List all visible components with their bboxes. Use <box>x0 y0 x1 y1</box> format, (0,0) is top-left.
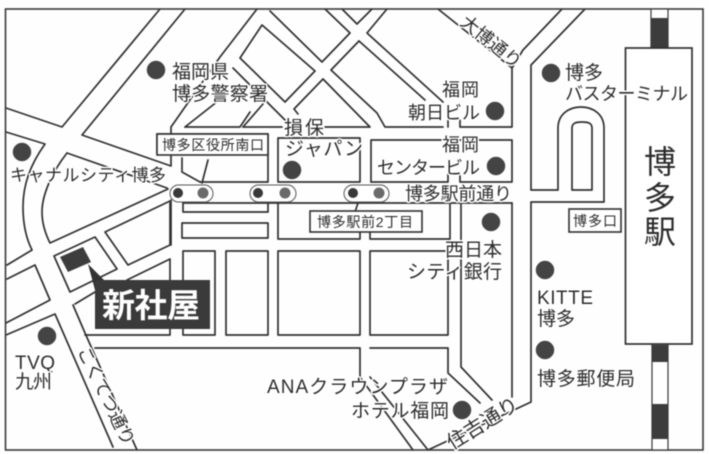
landmark: Fukuoka Center Building: 福岡 <box>442 135 479 155</box>
bus stop: Hakata station front 2-chome <box>310 211 422 232</box>
landmark: Hakata Bus Terminal <box>542 62 688 104</box>
bus stop: Hakata ward office south: 博多区役所南口 <box>162 137 264 153</box>
landmark: TVQ Kyushu: TVQ <box>15 353 55 374</box>
landmark: TVQ Kyushu: 九州 <box>15 371 52 393</box>
landmark: Fukuoka Asahi Building <box>408 80 504 123</box>
station name: 駅 <box>644 214 676 250</box>
landmark: Sompo Japan: ジャパン <box>285 139 363 160</box>
landmark: Fukuoka Prefectural Hakata Police Station: 博多警察署 <box>172 83 268 105</box>
stop 3 <box>344 185 389 202</box>
landmark: Fukuoka Center Building: センタービル <box>377 158 480 178</box>
landmark: Hakata Post Office: 博多郵便局 <box>537 368 635 390</box>
landmark: Hakata Post Office <box>536 341 635 390</box>
Hakata exit label: 博多口 <box>573 213 617 229</box>
landmark: Canal City Hakata <box>10 143 166 185</box>
railway track top <box>651 9 668 48</box>
landmark: KITTE Hakata: KITTE <box>537 288 593 309</box>
landmark: Hakata Bus Terminal: 博多 <box>565 62 603 84</box>
bus stop: Hakata station front 2-chome: 博多駅前2丁目 <box>317 214 413 230</box>
callout: new office <box>95 280 210 329</box>
landmark: Fukuoka Asahi Building: 福岡 <box>442 80 479 100</box>
landmark: Sompo Japan: 損保 <box>284 117 324 139</box>
bus stop capsules on main street <box>170 185 389 202</box>
station name <box>644 144 676 250</box>
landmark: Fukuoka Prefectural Hakata Police Station: 福岡県 <box>172 61 229 83</box>
marker pointer <box>88 264 108 290</box>
road name: Main street: 博多駅前通り <box>405 184 512 204</box>
stop 1 <box>170 185 213 202</box>
landmark: Sompo Japan <box>283 117 363 179</box>
landmark: Fukuoka Prefectural Hakata Police Station <box>147 61 268 105</box>
Hakata Station building <box>626 9 692 450</box>
station name: 博 <box>644 144 676 180</box>
landmark: ANA Crowne Plaza Hotel Fukuoka <box>267 376 471 422</box>
new head office marker <box>60 247 210 329</box>
landmark: Fukuoka Asahi Building: 朝日ビル <box>408 103 480 123</box>
landmark: ANA Crowne Plaza Hotel Fukuoka: ANAクラウンプラザ <box>267 376 448 398</box>
landmark: ANA Crowne Plaza Hotel Fukuoka: ホテル福岡 <box>351 400 449 422</box>
landmark: KITTE Hakata: 博多 <box>537 308 575 330</box>
landmark: Nishi-Nippon City Bank <box>407 213 502 283</box>
station outline <box>626 48 692 344</box>
road name: Taihaku-dori: 大博通り <box>457 12 525 72</box>
Hakata exit label <box>569 209 621 232</box>
landmark: Canal City Hakata: キャナルシティ博多 <box>10 166 166 185</box>
station name: 多 <box>644 180 676 216</box>
landmark: Nishi-Nippon City Bank: 西日本 <box>445 239 502 261</box>
building footprint <box>60 247 91 272</box>
landmark: Hakata Bus Terminal: バスターミナル <box>565 84 688 104</box>
railway track bottom <box>652 344 668 450</box>
landmark: TVQ Kyushu <box>15 327 56 393</box>
road name: Sumiyoshi-dori: 住吉通り <box>443 393 523 454</box>
landmark: KITTE Hakata <box>536 261 593 330</box>
callout: new office: 新社屋 <box>102 287 200 324</box>
stop 2 <box>250 185 296 202</box>
landmark: Fukuoka Center Building <box>377 135 505 178</box>
road name: Kokutetsu-dori: こくてつ通り <box>74 343 138 449</box>
landmark: Nishi-Nippon City Bank: シティ銀行 <box>407 261 502 283</box>
